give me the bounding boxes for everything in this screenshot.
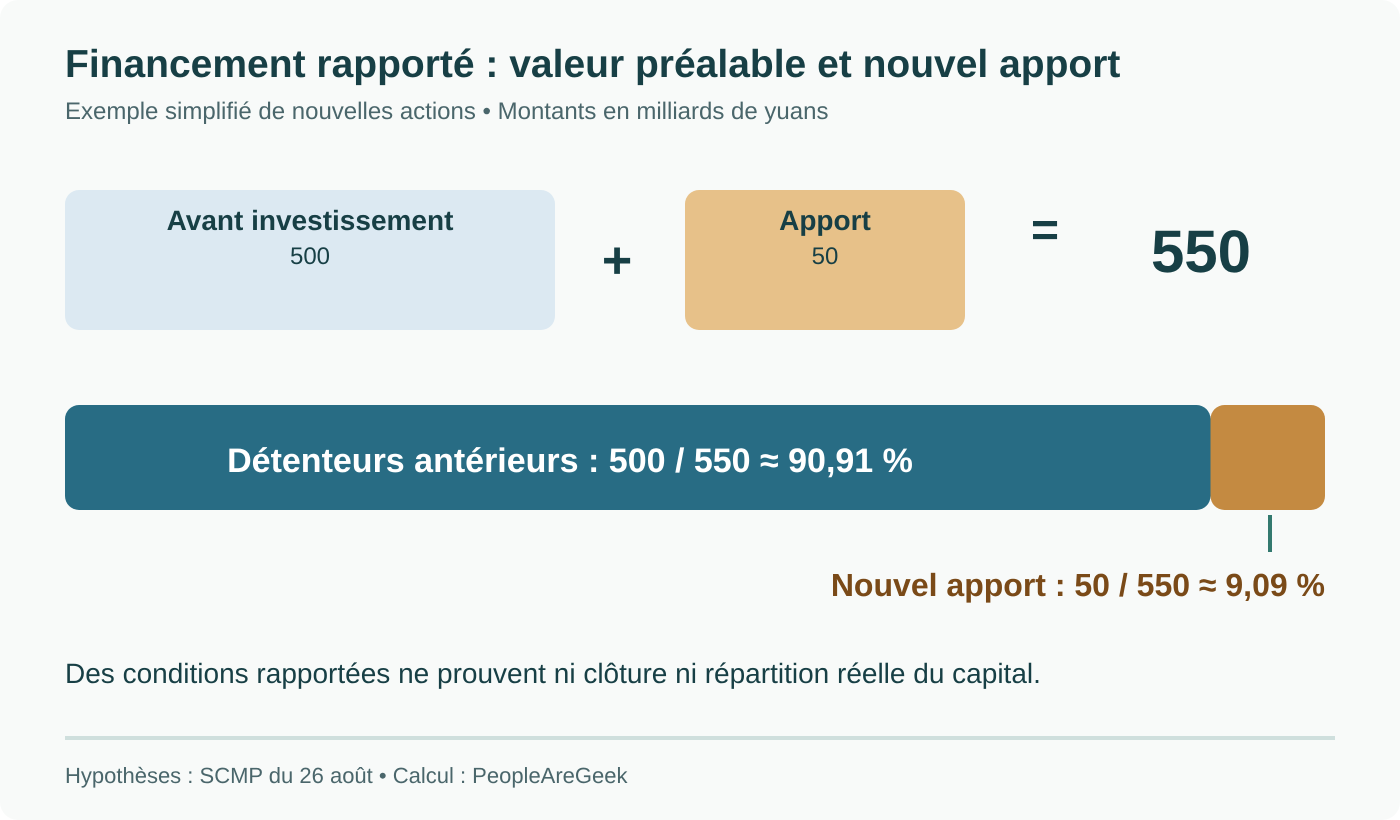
plus sign: + bbox=[602, 232, 632, 290]
panel: pre-investment value: 500 bbox=[290, 243, 330, 270]
panel: new contribution: 50 bbox=[812, 243, 838, 270]
connector line bbox=[1268, 515, 1272, 552]
panel: pre-investment value: Avant investissement bbox=[167, 205, 453, 236]
panel: new contribution bbox=[685, 190, 965, 330]
total value: 550 bbox=[1151, 218, 1251, 285]
stacked bar bbox=[65, 405, 1325, 510]
panel: new contribution: Apport bbox=[779, 205, 871, 236]
panel: pre-investment value bbox=[65, 190, 555, 330]
bar segment: new contribution bbox=[1210, 405, 1325, 510]
title: Financement rapporté : valeur préalable et nouvel apport bbox=[65, 43, 1120, 86]
callout: new contribution share: Nouvel apport : 50 / 550 ≈ 9,09 % bbox=[831, 567, 1325, 603]
source: Hypothèses : SCMP du 26 août • Calcul : PeopleAreGeek bbox=[65, 763, 628, 788]
equals sign: = bbox=[1031, 204, 1059, 257]
note: Des conditions rapportées ne prouvent ni clôture ni répartition réelle du capital. bbox=[65, 658, 1041, 689]
bar segment: prior holders: Détenteurs antérieurs : 500 / 550 ≈ 90,91 % bbox=[227, 442, 913, 480]
bar segment: prior holders bbox=[65, 405, 1210, 510]
subtitle: Exemple simplifié de nouvelles actions • Montants en milliards de yuans bbox=[65, 98, 828, 125]
